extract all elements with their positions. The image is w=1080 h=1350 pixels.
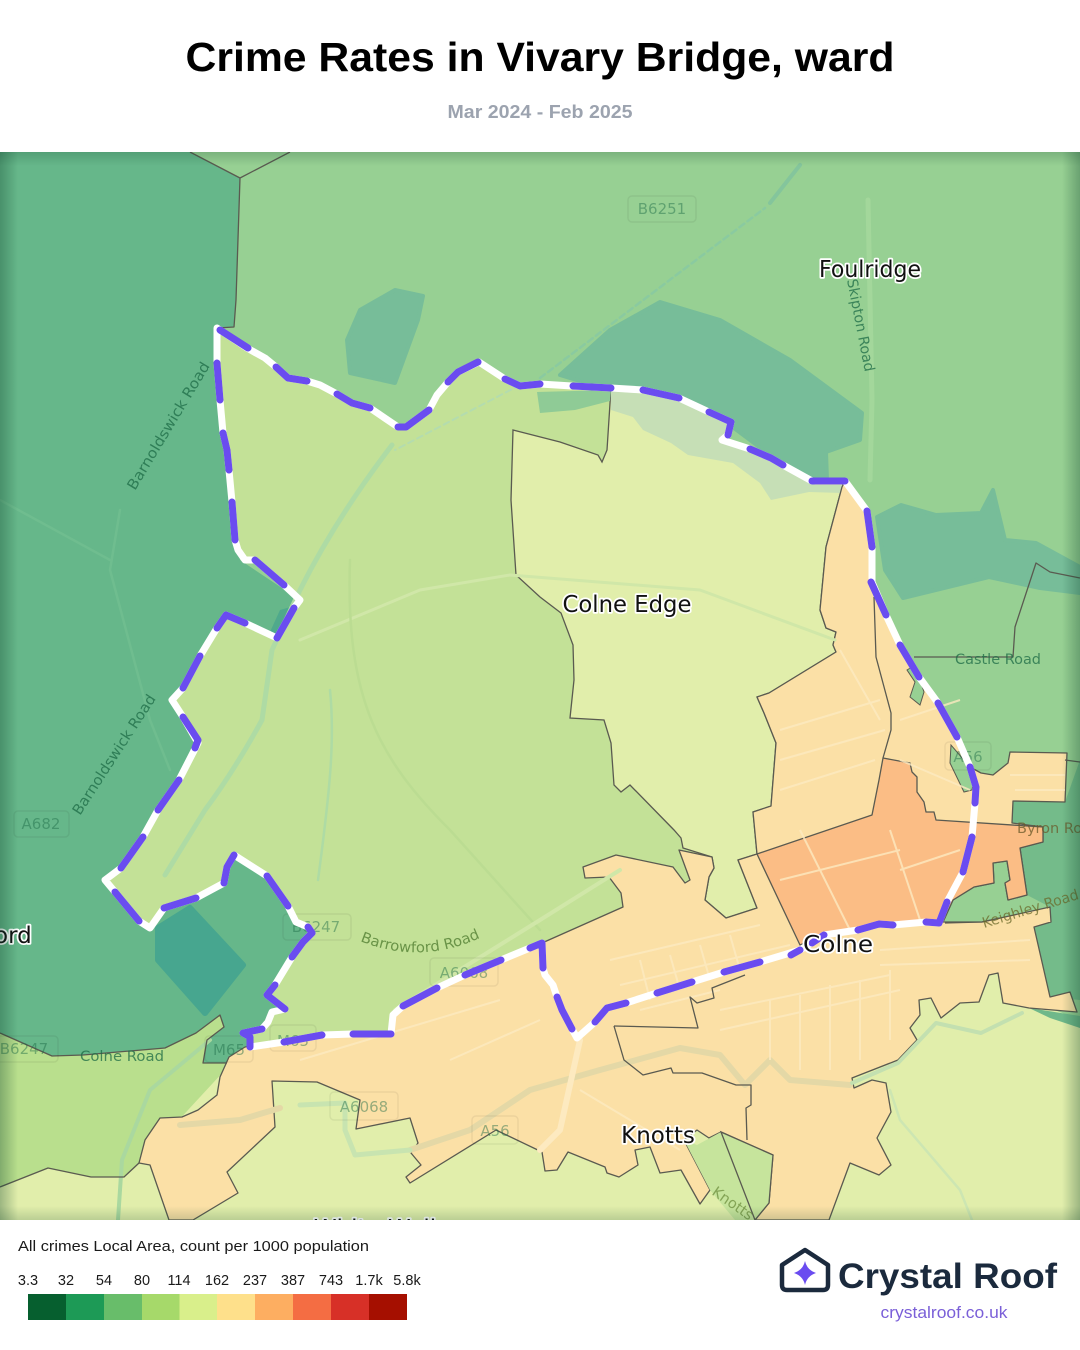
- road labels: Knotts: [709, 1184, 756, 1224]
- legend tick labels: 80: [134, 1273, 150, 1289]
- map base: surrounding area: [192, 152, 1080, 1016]
- road shields: A6068: [440, 964, 488, 982]
- logo: Crystal Roof: [782, 1250, 1057, 1322]
- place labels: Foulridge: [819, 257, 921, 283]
- road shields: B6247: [292, 918, 340, 936]
- road shields: M65: [277, 1032, 309, 1050]
- road labels: Barnoldswick Road: [125, 360, 214, 493]
- road shields: A6068: [340, 1098, 388, 1116]
- legend colour scale: [28, 1294, 407, 1320]
- legend tick labels: [18, 1273, 421, 1289]
- pale high ground strip: [611, 390, 845, 500]
- legend tick labels: 32: [58, 1273, 74, 1289]
- legend tick labels: 387: [281, 1273, 305, 1289]
- place labels: Knotts: [621, 1123, 695, 1149]
- town centre, higher crime: [757, 758, 1043, 945]
- legend tick labels: 114: [167, 1273, 191, 1289]
- road labels: [72, 279, 1080, 1264]
- water and high ground blobs: [347, 290, 1080, 598]
- road shields: A56: [953, 748, 983, 766]
- east area, darker band: [1012, 760, 1080, 1000]
- title: Crime Rates in Vivary Bridge, ward: [186, 34, 894, 80]
- reservoir: [158, 908, 243, 1013]
- road labels: Castle Road: [955, 652, 1041, 668]
- road labels: Barrowford Road: [362, 928, 479, 952]
- legend title: All crimes Local Area, count per 1000 population: [18, 1239, 369, 1255]
- legend tick labels: 3.3: [18, 1273, 38, 1289]
- subtitle: date range: Mar 2024 - Feb 2025: [448, 101, 632, 122]
- place labels: Colne: [803, 932, 873, 958]
- Colne Edge area, pale: [511, 388, 845, 918]
- road shields: M65: [213, 1041, 245, 1059]
- icon: house with star: [782, 1250, 828, 1290]
- map edge shading: [0, 152, 1080, 1220]
- legend tick labels: 162: [205, 1273, 229, 1289]
- logo wordmark: Crystal Roof: [838, 1257, 1057, 1296]
- road shields: B6251: [638, 200, 686, 218]
- road shields: A682: [22, 815, 60, 833]
- Vivary Bridge ward base: [110, 335, 698, 1043]
- website link: crystalroof.co.uk: [880, 1304, 1008, 1322]
- ward boundary: white line: [105, 328, 976, 1047]
- internal area boundaries: [0, 152, 1080, 1187]
- river, canal and roads: [0, 165, 1022, 1220]
- ward top teal strip: [537, 390, 611, 413]
- legend tick labels: 237: [243, 1273, 267, 1289]
- legend: [18, 1239, 421, 1320]
- road labels: Barnoldswick Road: [70, 692, 160, 818]
- south area, pale: [0, 960, 1080, 1220]
- place labels: White Walls: [314, 1216, 448, 1242]
- small green pockets on east edge: [907, 667, 975, 792]
- ward boundary: purple dashes: [115, 330, 976, 1047]
- legend tick labels: 5.8k: [393, 1273, 421, 1289]
- road labels: Skipton Road: [843, 278, 877, 373]
- Knotts pocket, green: [684, 1132, 773, 1220]
- road shields: B6247: [0, 1040, 48, 1058]
- place labels: Colne Edge: [562, 592, 692, 618]
- road shields: A56: [480, 1122, 510, 1140]
- south west area: [0, 1015, 227, 1187]
- Colne area, moderate crime: [139, 481, 1077, 1220]
- road shields: [0, 196, 991, 1144]
- legend tick labels: 54: [96, 1273, 112, 1289]
- legend tick labels: 743: [319, 1273, 343, 1289]
- west area, lowest crime: [0, 152, 312, 1063]
- place labels: [0, 257, 921, 1242]
- legend tick labels: 1.7k: [355, 1273, 383, 1289]
- town street grid: [300, 650, 1065, 1150]
- road labels: Colne Road: [80, 1049, 164, 1065]
